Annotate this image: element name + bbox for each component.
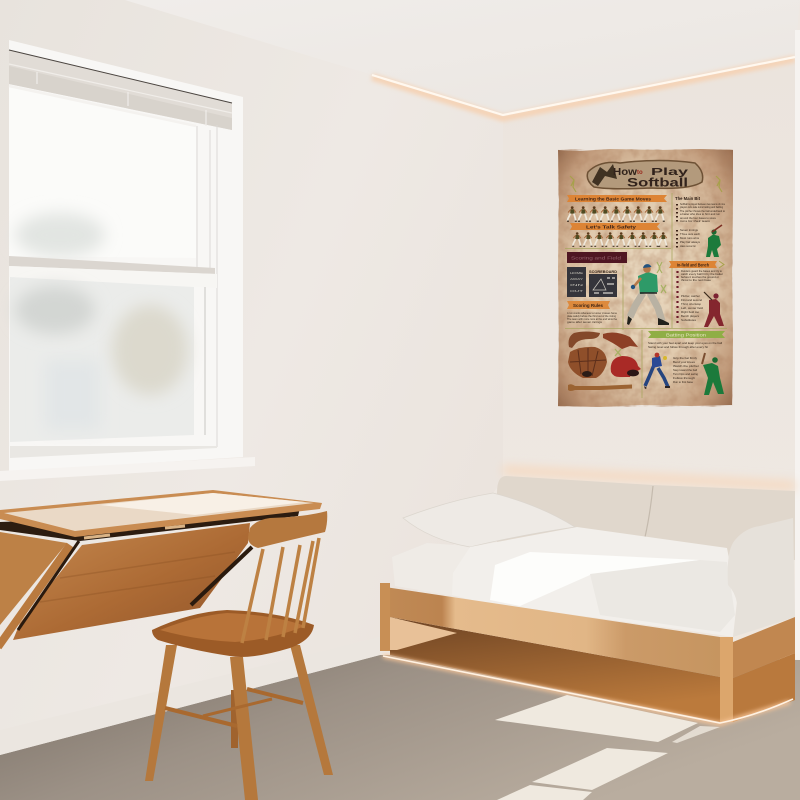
right edge pillar xyxy=(795,30,800,705)
dark chart panel: HOME xyxy=(570,271,583,275)
poster paper xyxy=(558,149,733,407)
text block xyxy=(681,269,723,322)
text block: catch every ball hit by the batter xyxy=(681,272,723,276)
maroon banner: Scoring and Field xyxy=(571,256,622,260)
decorative figure left xyxy=(570,176,576,192)
bottom rail xyxy=(10,446,217,458)
text block: Third, shortstop xyxy=(681,302,701,306)
text block: plate safely before the third out of the inning xyxy=(567,314,616,318)
text block xyxy=(673,356,699,384)
dark chart panel: OUT xyxy=(570,289,583,293)
bullets xyxy=(676,271,679,323)
duvet xyxy=(452,527,737,637)
icon: batting helmet xyxy=(611,356,641,377)
window frame xyxy=(9,40,243,472)
text block: Turn hips and swing xyxy=(673,372,698,376)
poster: How to Play Softball xyxy=(558,149,733,407)
bullets xyxy=(676,204,678,248)
text block: Three outs each xyxy=(680,232,700,236)
wooden chair xyxy=(145,511,333,800)
illustration: green batter lower xyxy=(702,353,724,395)
text block: Step toward the ball xyxy=(673,368,697,372)
mattress xyxy=(392,543,480,600)
poster title xyxy=(587,160,703,190)
text block: Pitcher, catcher xyxy=(681,294,700,298)
window sill xyxy=(0,457,255,481)
panel: softball gear xyxy=(568,332,641,391)
text block: The pitcher throws the ball underhand to xyxy=(680,209,725,213)
window xyxy=(0,40,255,481)
chair back rail xyxy=(248,511,327,548)
panel: learning fielding moves xyxy=(567,195,668,246)
bed leg left xyxy=(380,583,390,651)
text block: runs for their team xyxy=(680,219,711,223)
text block: Have some fun xyxy=(680,244,696,248)
meeting rail xyxy=(9,256,215,274)
under-bed recess xyxy=(390,617,720,722)
text block: Fielders guard the bases and try to xyxy=(681,269,722,273)
text block: Follow through xyxy=(673,376,695,380)
orange sub banner: Scoring Rules xyxy=(573,303,604,308)
icon: mitt left xyxy=(569,332,600,348)
illustration: runner xyxy=(644,353,670,389)
icon: baseball bat xyxy=(568,384,632,391)
decorative figure right xyxy=(716,176,722,192)
text block: Stand with your feet apart and keep your eyes on the ball xyxy=(648,341,722,345)
text block: players who take turns batting and fielding xyxy=(680,205,723,209)
baseboard xyxy=(0,637,380,755)
bed xyxy=(380,470,795,724)
text block: Substitutes xyxy=(681,318,697,322)
text block: Left, center field xyxy=(681,306,703,310)
dark chart panel xyxy=(567,267,586,297)
poster title: to xyxy=(637,170,643,176)
ceiling xyxy=(125,0,800,115)
text block: The team with more runs at the end wins the xyxy=(567,317,617,321)
poster title: How xyxy=(613,166,638,178)
green banner: Batting Position xyxy=(666,332,707,338)
chair seat xyxy=(152,610,314,657)
heading: The Main Bit xyxy=(675,196,700,202)
text block: a batter who tries to hit it and run xyxy=(680,212,720,216)
text block: Seven innings xyxy=(680,228,699,232)
pillow xyxy=(403,493,575,547)
figure row 1 xyxy=(567,206,665,221)
chair stretchers xyxy=(165,689,303,726)
ceiling light strip xyxy=(372,57,795,118)
text block: Softball is played between two teams of nine xyxy=(680,202,725,206)
text block: around the four bases to score xyxy=(680,216,716,220)
icon: mitt right xyxy=(603,333,638,349)
text block xyxy=(648,341,722,349)
text block: before it touches the ground or xyxy=(681,275,719,279)
lower glass xyxy=(10,277,194,442)
icon: fielding glove xyxy=(568,347,607,378)
window blind xyxy=(9,50,232,130)
dark chart panel: INN xyxy=(570,283,583,287)
bed right under recess xyxy=(733,653,795,722)
bed leg right xyxy=(720,637,733,722)
dark chart panel: AWAY xyxy=(570,277,583,281)
text block: Bend your knees xyxy=(673,360,696,364)
panel: the main bit xyxy=(675,196,725,257)
heading banner: Learning the Basic Game Moves xyxy=(575,196,651,202)
text block xyxy=(680,202,725,248)
bed rail front xyxy=(385,587,720,677)
wall-mounted desk xyxy=(0,490,322,647)
poster title: Softball xyxy=(627,176,688,190)
sunlight patches xyxy=(495,695,720,800)
field diagram xyxy=(589,274,617,297)
decorative vine xyxy=(657,262,666,293)
sash stile xyxy=(197,125,217,447)
right wall xyxy=(503,57,795,720)
text block: throw to the next base xyxy=(681,278,711,282)
desk underside xyxy=(0,508,300,541)
panel: the infield xyxy=(669,261,724,327)
bed rail right xyxy=(733,617,795,678)
illustration: maroon batter xyxy=(704,292,724,327)
text block: Most runs wins xyxy=(680,236,700,240)
back cushions xyxy=(497,476,795,560)
text block: First and second xyxy=(681,298,702,302)
text block: A run counts whenever a runner crosses home xyxy=(567,311,617,315)
text block: Grip the bat firmly xyxy=(673,356,698,360)
panel: batting tips xyxy=(644,331,725,395)
desk top xyxy=(0,490,322,537)
under-bed light strip xyxy=(383,656,793,724)
text block: Watch the pitcher xyxy=(673,364,699,368)
text block: game after seven innings xyxy=(567,320,603,324)
bed wall glow xyxy=(503,470,795,486)
panel: scoreboard xyxy=(567,252,627,324)
sub heading: SCOREBOARD xyxy=(589,270,618,274)
desk front panel xyxy=(13,523,250,640)
chair spindles xyxy=(242,538,319,643)
text block: Play fair always xyxy=(680,240,701,244)
poster title: Play xyxy=(651,166,688,178)
text block: Swing level and follow through after every hit xyxy=(648,345,708,349)
heading banner 2: Let's Talk Safety xyxy=(586,224,636,230)
illustration: central batter xyxy=(627,264,669,325)
chair legs xyxy=(145,645,333,800)
illustration: green batter xyxy=(706,225,722,257)
left wall xyxy=(0,0,503,760)
figure row 2 xyxy=(572,232,668,246)
orange heading banner: In-field and Bench xyxy=(677,262,709,268)
floor xyxy=(0,655,800,800)
desk left panel xyxy=(0,532,67,625)
side cushion xyxy=(728,518,795,637)
text block: Run to first base xyxy=(673,380,693,384)
upper glass xyxy=(9,86,196,258)
desk brace xyxy=(0,545,70,647)
text block xyxy=(567,311,617,324)
text block: Bench players xyxy=(681,314,700,318)
decorative vine xyxy=(615,349,621,356)
text block: Right field too xyxy=(681,310,699,314)
